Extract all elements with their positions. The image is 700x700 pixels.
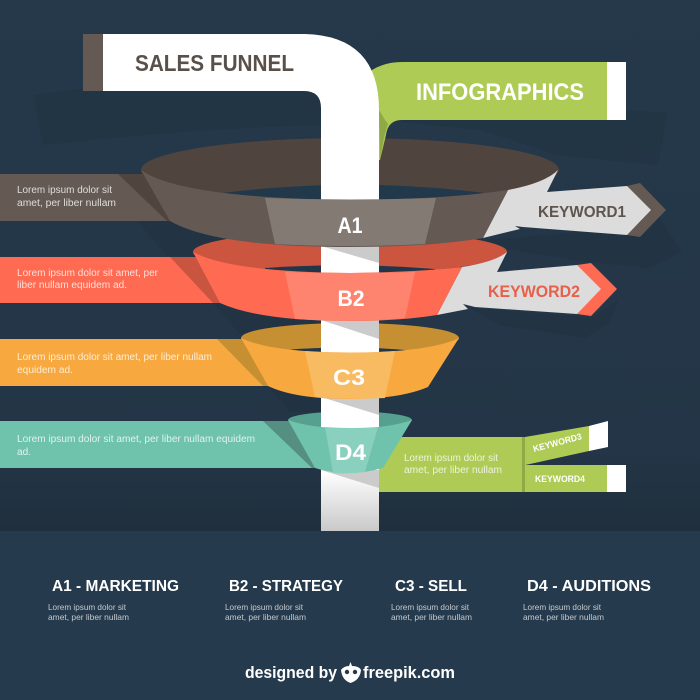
legend: A1 marketing: A1 - MARKETING (52, 578, 179, 595)
funnel band A1 (141, 170, 508, 247)
legend: B2 strategy: amet, per liber nullam (225, 612, 306, 622)
funnel rim B2 (193, 231, 507, 278)
ribbon D4: teal text band (0, 421, 316, 468)
legend: D4 auditions: Lorem ipsum dolor sit (523, 602, 602, 612)
white funnel stem with title (103, 34, 379, 531)
funnel band C3 (241, 338, 459, 399)
legend: B2 strategy: Lorem ipsum dolor sit (225, 602, 304, 612)
green text panel and keywords: Lorem ipsum dolor sit (404, 453, 498, 464)
legend: D4 auditions: amet, per liber nullam (523, 612, 604, 622)
keyword 4 flag (525, 465, 626, 492)
keyword 2 arrow: KEYWORD2 (488, 283, 580, 301)
legend: A1 marketing (48, 578, 179, 622)
ribbon A1: brown text band: amet, per liber nullam (17, 198, 116, 209)
funnel rim A1 (141, 138, 559, 205)
white funnel stem with title: SALES FUNNEL (135, 50, 294, 76)
keyword 1 arrow (483, 170, 666, 238)
funnel band B2: B2 (338, 286, 364, 311)
legend: A1 marketing: amet, per liber nullam (48, 612, 129, 622)
ribbon D4: teal text band: ad. (17, 447, 31, 458)
keyword 3 flag (525, 421, 608, 465)
funnel band C3: C3 (333, 365, 365, 390)
legend: C3 sell: C3 - SELL (395, 578, 467, 595)
green text panel and keywords: amet, per liber nullam (404, 465, 502, 476)
funnel band B2 (193, 252, 462, 321)
drop shadows (33, 88, 682, 412)
legend: C3 sell: amet, per liber nullam (391, 612, 472, 622)
footer credit: designed by (245, 664, 338, 682)
brown header tab (83, 34, 104, 91)
ribbon C3: orange text band (0, 339, 270, 386)
ribbon B2: red text band: Lorem ipsum dolor sit amet, per (17, 268, 159, 279)
ribbon D4: teal text band: Lorem ipsum dolor sit amet, per liber nullam equidem (17, 434, 255, 445)
funnel band A1: A1 (338, 213, 362, 238)
green header ribbon (372, 62, 626, 160)
green text panel and keywords (379, 421, 626, 492)
legend: A1 marketing: Lorem ipsum dolor sit (48, 602, 127, 612)
keyword 3 flag: KEYWORD3 (532, 431, 583, 454)
ribbon C3: orange text band: Lorem ipsum dolor sit amet, per liber nullam (17, 352, 212, 363)
legend: D4 auditions: D4 - AUDITIONS (527, 578, 651, 595)
legend: C3 sell: Lorem ipsum dolor sit (391, 602, 470, 612)
keyword 1 arrow: KEYWORD1 (538, 204, 626, 221)
legend: B2 strategy: B2 - STRATEGY (229, 578, 344, 595)
funnel band D4 (288, 420, 412, 473)
ribbon A1: brown text band (0, 174, 175, 221)
legend: B2 strategy (225, 578, 344, 622)
ribbon B2: red text band: liber nullam equidem ad. (17, 280, 127, 291)
footer credit: freepik.com (363, 664, 455, 682)
keyword 4 flag: KEYWORD4 (535, 474, 586, 485)
footer credit (245, 662, 455, 683)
ribbon C3: orange text band: equidem ad. (17, 365, 73, 376)
funnel rim D4 (288, 412, 412, 428)
stem fold shadows (321, 246, 379, 488)
funnel rim C3 (241, 323, 459, 358)
legend: C3 sell (391, 578, 472, 622)
keyword 2 arrow (437, 252, 617, 316)
funnel band D4: D4 (335, 440, 367, 465)
ribbon B2: red text band (0, 257, 222, 303)
icon: freepik mascot (341, 662, 361, 683)
green header ribbon: INFOGRAPHICS (416, 79, 584, 106)
legend: D4 auditions (523, 578, 651, 622)
ribbon A1: brown text band: Lorem ipsum dolor sit (17, 185, 112, 196)
